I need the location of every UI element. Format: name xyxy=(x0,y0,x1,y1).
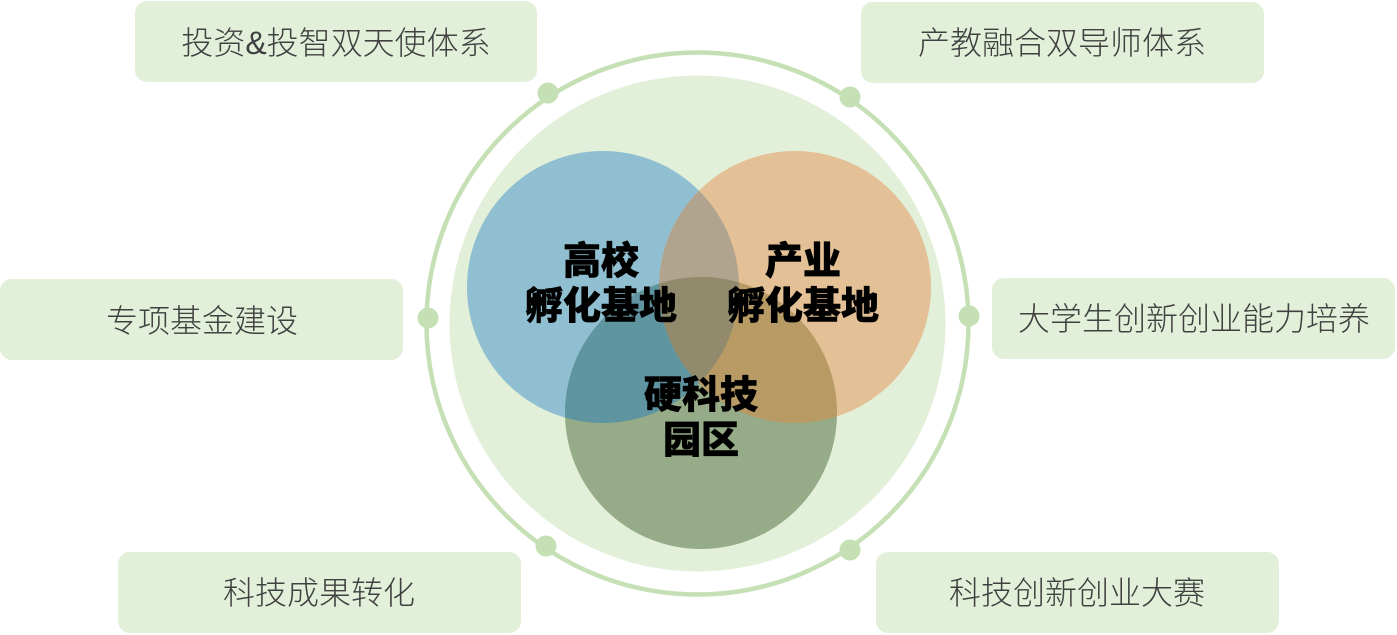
venn diagram xyxy=(467,151,931,549)
label: industry incubator: 产业 xyxy=(765,241,841,283)
overlap: university and industry xyxy=(659,190,739,284)
label: industry incubator: 孵化基地 xyxy=(727,286,879,328)
box: dual mentor system xyxy=(861,2,1264,83)
overlap: university and park xyxy=(565,277,739,423)
label: university incubator: 高校 xyxy=(563,240,639,283)
circle: hard tech park xyxy=(565,277,837,549)
box: special fund: 专项基金建设 xyxy=(106,303,298,339)
box: tech transfer xyxy=(118,552,521,633)
box: angel system: 投资&投智双天使体系 xyxy=(181,25,491,61)
label: hard tech park xyxy=(644,375,758,462)
box: angel system xyxy=(135,1,537,82)
overlap: industry and park xyxy=(659,277,837,423)
box: competition: 科技创新创业大赛 xyxy=(949,575,1205,611)
label: hard tech park: 硬科技 xyxy=(644,375,758,417)
label: industry incubator xyxy=(727,241,879,328)
box: student ability: 大学生创新创业能力培养 xyxy=(1018,301,1370,337)
inner disc xyxy=(450,76,946,572)
label: university incubator xyxy=(525,240,677,328)
overlap: all three xyxy=(659,277,739,383)
box: special fund xyxy=(0,279,403,360)
circle: university xyxy=(467,151,739,423)
label: university incubator: 孵化基地 xyxy=(525,286,677,328)
label: hard tech park: 园区 xyxy=(663,420,739,462)
box: competition xyxy=(876,552,1279,633)
ring nodes xyxy=(418,82,980,560)
box: tech transfer: 科技成果转化 xyxy=(223,575,415,611)
box: student ability xyxy=(992,278,1395,359)
box: dual mentor system: 产教融合双导师体系 xyxy=(918,25,1206,61)
circle: industry xyxy=(659,151,931,423)
outer ring xyxy=(426,52,968,594)
